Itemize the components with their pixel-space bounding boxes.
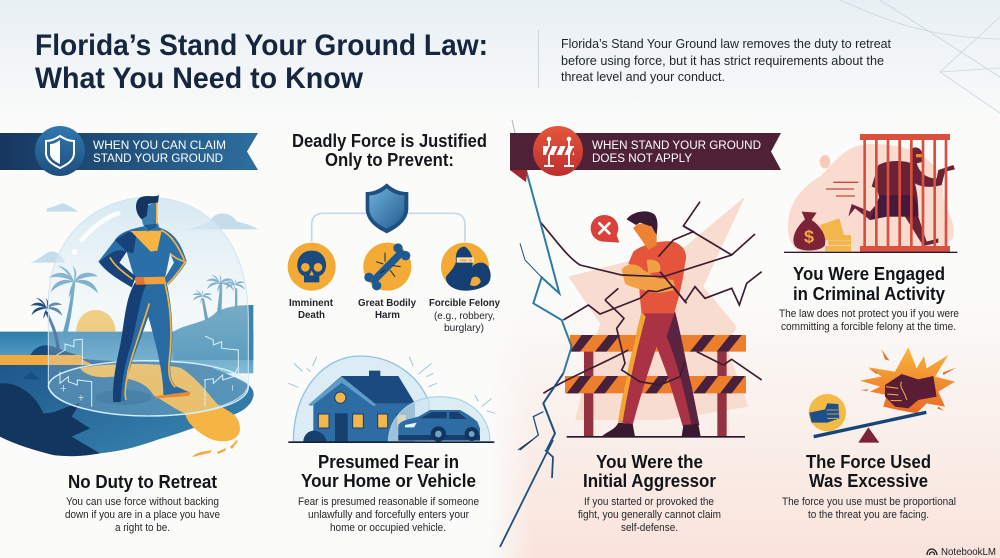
intro text: threat level and your conduct. <box>561 69 725 84</box>
text: presumed fear <box>298 451 479 534</box>
labels: deadly force: Great Bodily <box>358 297 416 309</box>
text: initial aggressor: self-defense. <box>621 522 678 534</box>
text: criminal activity: The law does not protect you if you were <box>779 308 959 320</box>
banner: does not apply: DOES NOT APPLY <box>592 153 692 165</box>
labels: deadly force: Death <box>298 309 325 321</box>
banner: does not apply <box>510 126 781 182</box>
text: presumed fear: Your Home or Vehicle <box>301 470 476 491</box>
text: initial aggressor: You Were the <box>596 451 703 472</box>
labels: deadly force: Harm <box>375 309 400 321</box>
text: force excessive: The force you use must be proportional <box>782 496 956 508</box>
text: initial aggressor: If you started or provoked the <box>584 496 714 508</box>
text: no duty to retreat: down if you are in a place you have <box>65 509 220 521</box>
text: initial aggressor: Initial Aggressor <box>583 470 716 491</box>
banner: when you can claim <box>0 126 258 176</box>
text: no duty to retreat <box>65 471 220 534</box>
icon: shield <box>46 136 74 168</box>
banner: when you can claim: STAND YOUR GROUND <box>93 153 223 165</box>
heading: deadly force: Deadly Force is Justified <box>292 130 487 151</box>
labels: deadly force <box>289 297 500 334</box>
text: presumed fear: unlawfully and forcefully enters your <box>308 509 469 521</box>
logo: NotebookLM: NotebookLM <box>941 546 996 558</box>
orange dashes below Florida <box>192 440 238 457</box>
illustration: aggressor behind barrier with cracks <box>520 170 762 450</box>
labels: deadly force: burglary) <box>444 322 484 334</box>
icon: money bag <box>793 212 825 251</box>
illustration: excessive force scale <box>809 347 957 443</box>
intro text: before using force, but it has strict requirements about the <box>561 53 884 68</box>
icon: red x speech bubble <box>591 215 619 243</box>
icon: burglar <box>446 247 491 291</box>
crack lower continuation <box>500 440 553 547</box>
intro text: Florida’s Stand Your Ground law removes the duty to retreat <box>561 36 891 51</box>
heading: deadly force <box>292 130 487 170</box>
text: force excessive: Was Excessive <box>809 470 928 491</box>
labels: deadly force: (e.g., robbery, <box>434 310 495 322</box>
text: force excessive <box>782 451 956 521</box>
text: force excessive: to the threat you are facing. <box>808 509 929 521</box>
title: Florida’s Stand Your Ground Law: <box>35 29 488 62</box>
title: What You Need to Know <box>35 62 363 95</box>
banner: does not apply: WHEN STAND YOUR GROUND <box>592 140 761 152</box>
heading: deadly force: Only to Prevent: <box>325 149 454 170</box>
labels: deadly force: Forcible Felony <box>429 297 500 309</box>
text: criminal activity <box>779 263 959 333</box>
text: presumed fear: Presumed Fear in <box>318 451 459 472</box>
text: initial aggressor: fight, you generally cannot claim <box>578 509 721 521</box>
title <box>35 29 488 95</box>
text: initial aggressor <box>578 451 721 534</box>
text: force excessive: The Force Used <box>806 451 931 472</box>
text: criminal activity: in Criminal Activity <box>793 283 946 304</box>
text: no duty to retreat: No Duty to Retreat <box>68 471 217 492</box>
diagram: deadly force icons <box>288 183 491 291</box>
illustration: criminal in cage <box>784 134 957 253</box>
text: presumed fear: home or occupied vehicle. <box>330 522 446 534</box>
text: no duty to retreat: You can use force without backing <box>66 496 219 508</box>
illustration: house and car <box>288 356 495 443</box>
text: criminal activity: You Were Engaged <box>793 263 945 284</box>
text: no duty to retreat: a right to be. <box>115 522 170 534</box>
icon: broken bone <box>364 243 410 290</box>
labels: deadly force: Imminent <box>289 297 333 309</box>
icon: money bag: $ <box>804 227 814 247</box>
icon: skull <box>297 251 326 282</box>
icon: barricade <box>543 137 574 166</box>
illustration: hero on Florida under dome <box>0 195 258 456</box>
text: presumed fear: Fear is presumed reasonable if someone <box>298 496 479 508</box>
banner: when you can claim: WHEN YOU CAN CLAIM <box>93 140 226 152</box>
intro text <box>538 30 891 88</box>
text: criminal activity: committing a forcible felony at the time. <box>781 321 956 333</box>
